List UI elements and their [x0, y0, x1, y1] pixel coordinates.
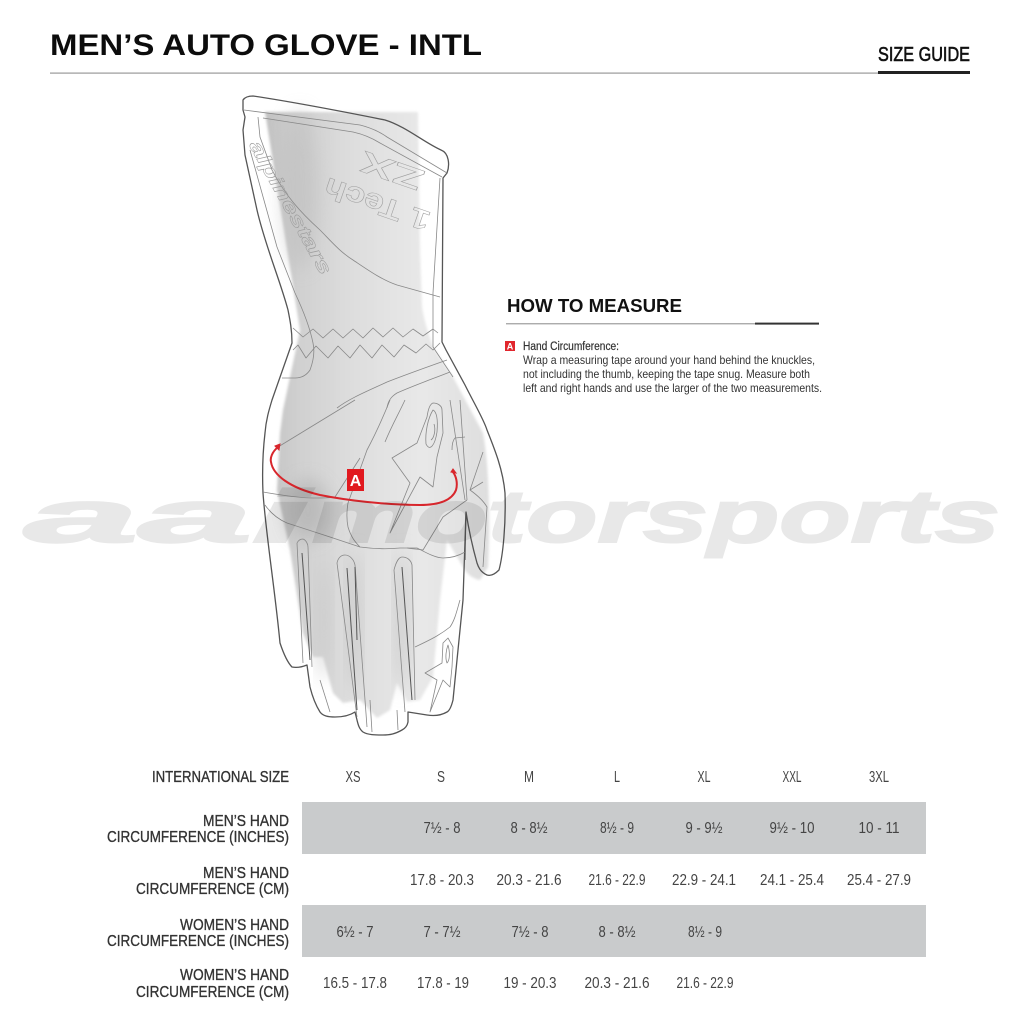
women's inches row: 8½ - 9	[688, 924, 722, 941]
men's cm row: 21.6 - 22.9	[588, 872, 646, 889]
row labels	[107, 769, 289, 1001]
measure instructions: Hand Circumference:	[523, 341, 619, 353]
header rule	[50, 72, 878, 74]
women's cm row: 20.3 - 21.6	[584, 975, 650, 992]
men's inches row: 9½ - 10	[770, 820, 815, 837]
men's cm row	[410, 872, 911, 889]
watermark: motorsports	[312, 475, 1000, 558]
icon: large star logo	[390, 403, 443, 533]
cuff logo: tech 1-ZX: ZX	[356, 144, 428, 197]
size header row: XXL	[782, 769, 802, 786]
row labels: MEN’S HAND	[203, 865, 289, 882]
men's inches row: 8 - 8½	[510, 820, 548, 837]
size guide tab	[878, 44, 970, 74]
size header row: S	[437, 769, 445, 786]
women's inches row	[336, 924, 722, 941]
glove seams	[244, 110, 487, 732]
women's cm row	[323, 975, 734, 992]
table row bands	[302, 802, 926, 957]
men's cm row: 22.9 - 24.1	[672, 872, 736, 889]
how to measure rule	[506, 323, 819, 325]
measure instructions	[523, 341, 822, 395]
men's inches row	[424, 820, 900, 837]
women's inches row: 8 - 8½	[598, 924, 636, 941]
cuff logo: tech 1-ZX: 1 Tech	[320, 172, 434, 237]
glove finger dark lines	[302, 512, 466, 710]
row labels: WOMEN’S HAND	[180, 917, 289, 934]
size header row: 3XL	[869, 769, 889, 786]
glove outline	[243, 96, 505, 735]
glove illustration	[243, 96, 505, 735]
size header row: L	[614, 769, 620, 786]
men's inches row: 10 - 11	[858, 820, 900, 837]
size table	[107, 769, 926, 1001]
women's cm row: 19 - 20.3	[504, 975, 557, 992]
women's inches row: 7½ - 8	[512, 924, 549, 941]
women's cm row: 21.6 - 22.9	[676, 975, 734, 992]
men's inches row: 9 - 9½	[686, 820, 722, 837]
men's cm row: 20.3 - 21.6	[496, 872, 562, 889]
icon: small star logo	[425, 638, 453, 712]
watermark	[24, 475, 1000, 558]
measurement arc A: A	[350, 473, 362, 490]
size header row: XL	[698, 769, 711, 786]
size header row	[346, 769, 889, 786]
size guide tab: SIZE GUIDE	[878, 44, 970, 66]
glove hand shading	[265, 110, 489, 718]
cuff logo: alpinestars: alpinestars	[244, 137, 335, 279]
measure instructions: not including the thumb, keeping the tape snug. Measure both	[523, 367, 810, 381]
icon: A badge: A	[507, 342, 514, 352]
women's cm row: 16.5 - 17.8	[323, 975, 387, 992]
row labels: CIRCUMFERENCE (CM)	[136, 984, 289, 1001]
measure instructions: Wrap a measuring tape around your hand behind the knuckles,	[523, 353, 815, 367]
measure instructions: left and right hands and use the larger of the two measurements.	[523, 381, 822, 395]
men's inches row: 7½ - 8	[424, 820, 461, 837]
cuff logo: tech 1-ZX	[320, 136, 446, 237]
watermark: aai	[24, 475, 313, 558]
how to measure heading: HOW TO MEASURE	[507, 296, 682, 316]
men's cm row: 17.8 - 20.3	[410, 872, 474, 889]
row labels: CIRCUMFERENCE (CM)	[136, 881, 289, 898]
row labels: CIRCUMFERENCE (INCHES)	[107, 829, 289, 846]
men's inches row: 8½ - 9	[600, 820, 634, 837]
title: MEN’S AUTO GLOVE - INTL	[50, 29, 482, 62]
measurement arc A	[271, 444, 457, 505]
men's cm row: 24.1 - 25.4	[760, 872, 824, 889]
women's cm row: 17.8 - 19	[417, 975, 469, 992]
row labels: MEN’S HAND	[203, 813, 289, 830]
icon: A badge	[505, 341, 515, 352]
size header row: XS	[346, 769, 360, 786]
women's inches row: 6½ - 7	[336, 924, 374, 941]
how to measure panel	[505, 296, 822, 395]
row labels: CIRCUMFERENCE (INCHES)	[107, 933, 289, 950]
row labels: INTERNATIONAL SIZE	[152, 769, 289, 786]
women's inches row: 7 - 7½	[424, 924, 460, 941]
row labels: WOMEN’S HAND	[180, 967, 289, 984]
size header row: M	[524, 769, 534, 786]
men's cm row: 25.4 - 27.9	[847, 872, 911, 889]
